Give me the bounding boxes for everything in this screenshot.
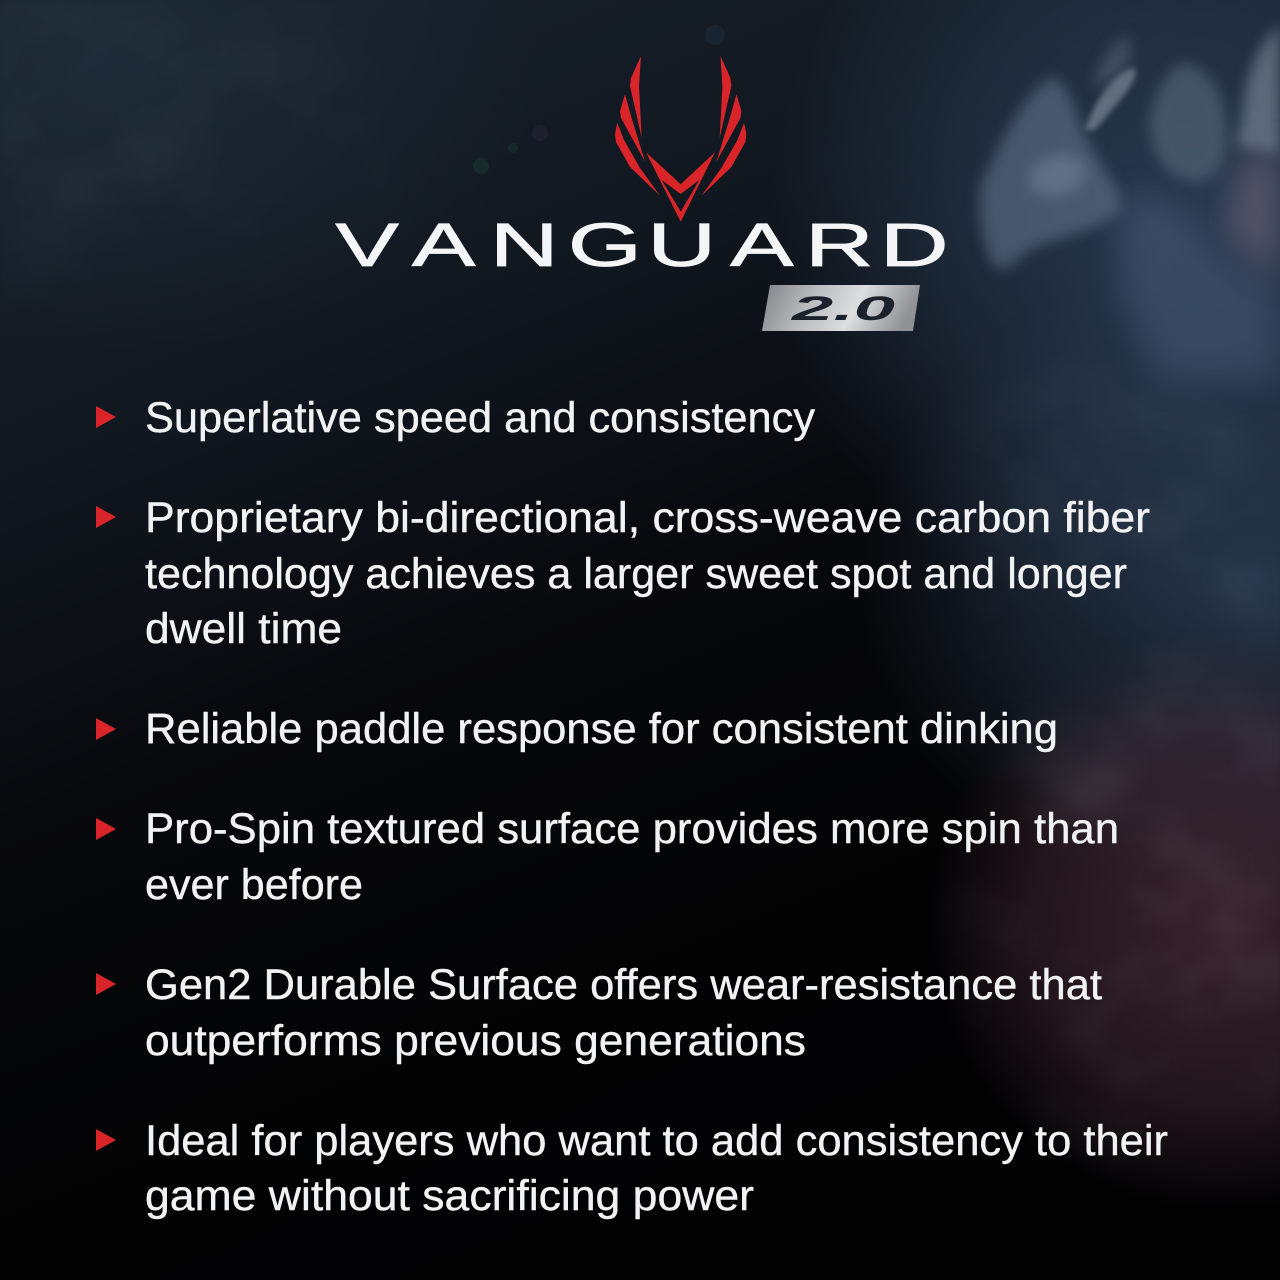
logo: VANGUARD wordmark: VANGUARD (335, 211, 949, 279)
logo: red wing emblem (615, 56, 746, 222)
bullet: Gen2 Durable Surface (96, 961, 1102, 1065)
bullet: carbon fiber technology: dwell time (145, 605, 342, 653)
bullet: ideal for players: Ideal for players who want to add consistency to their (145, 1117, 1168, 1165)
bullet: Pro-Spin surface: Pro-Spin textured surface provides more spin than (145, 805, 1119, 853)
bullet: Gen2 Durable Surface: Gen2 Durable Surface offers wear-resistance that (145, 961, 1102, 1009)
bullet: Gen2 Durable Surface: outperforms previous generations (145, 1017, 806, 1065)
bullet: ideal for players: game without sacrificing power (145, 1172, 754, 1220)
bullet: paddle response: Reliable paddle response for consistent dinking (145, 705, 1058, 753)
bullet: Pro-Spin surface: ever before (145, 861, 363, 909)
bullet: carbon fiber technology: technology achieves a larger sweet spot and longer (145, 550, 1127, 598)
bullet: carbon fiber technology (96, 494, 1150, 653)
logo: 2.0 badge (762, 285, 920, 331)
bullet: carbon fiber technology: Proprietary bi-directional, cross-weave carbon fiber (145, 494, 1150, 542)
logo: 2.0 badge: 2.0 (790, 290, 895, 328)
bullet: Pro-Spin surface (96, 805, 1119, 909)
bullet: ideal for players (96, 1117, 1168, 1220)
bullet: speed and consistency: Superlative speed and consistency (145, 394, 815, 442)
